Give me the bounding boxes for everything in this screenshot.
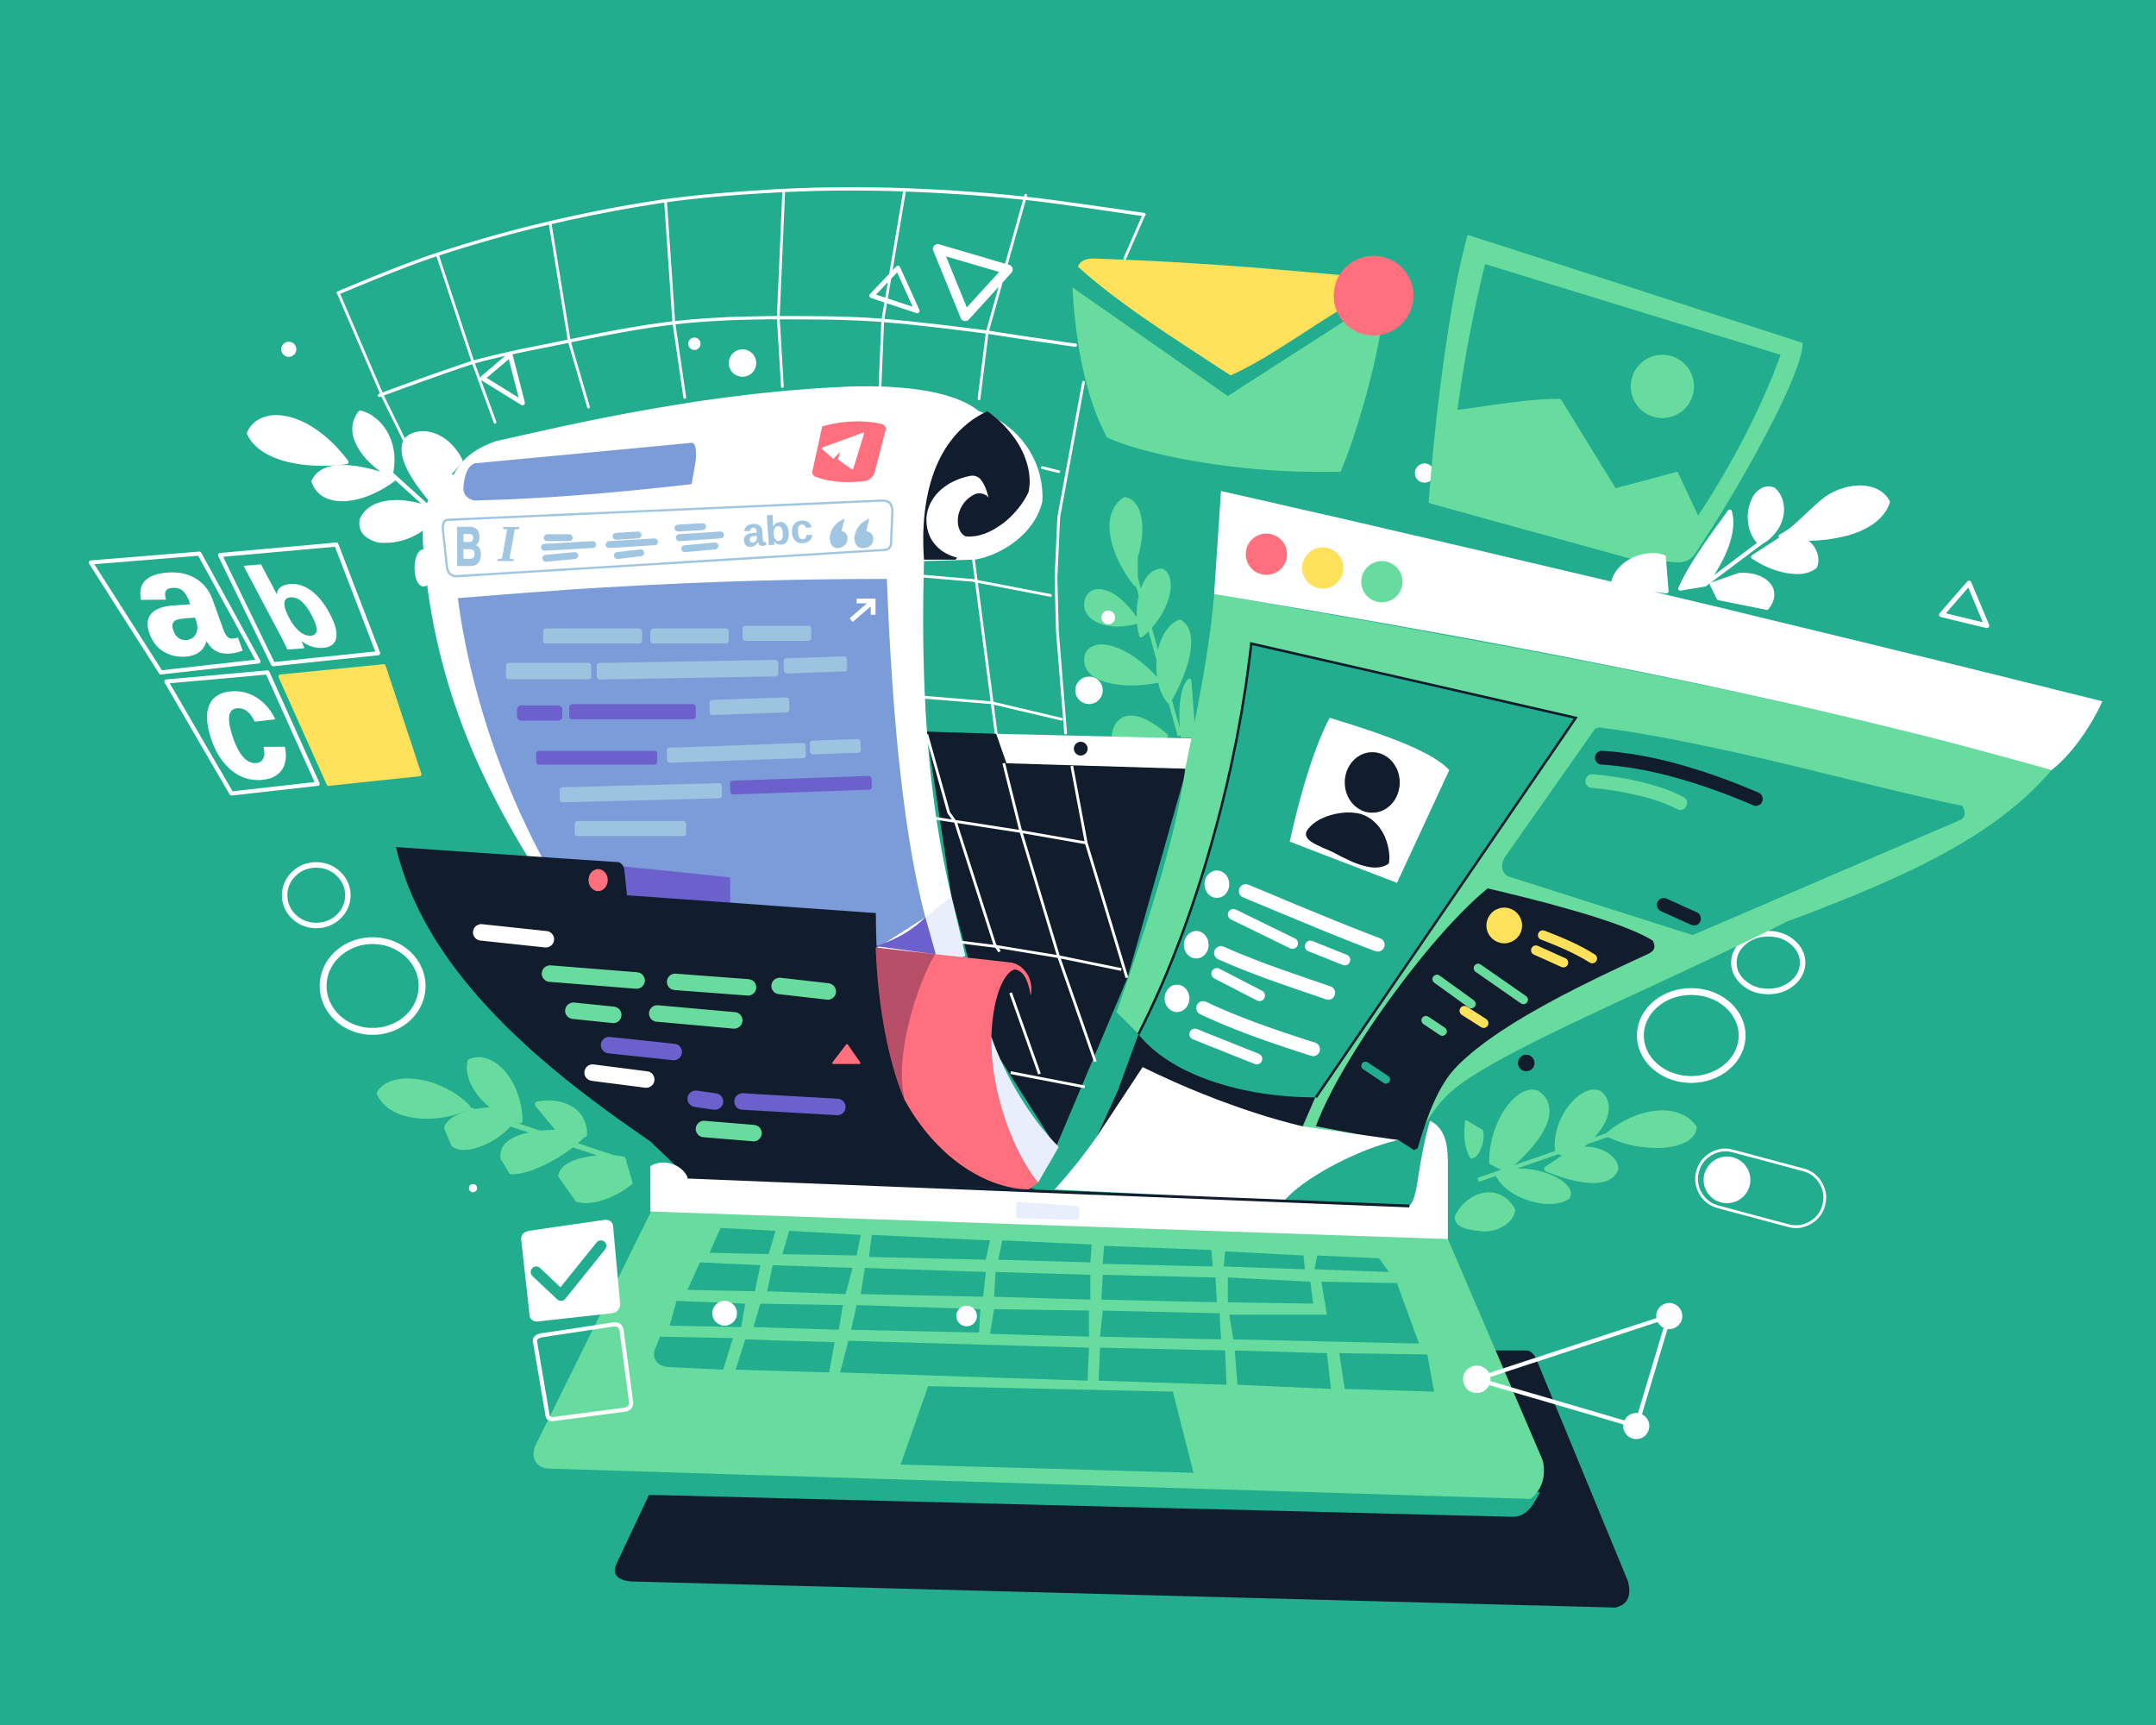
browser window — [1035, 491, 2103, 1189]
checkbox empty — [535, 1324, 631, 1419]
warning triangle — [833, 1045, 859, 1063]
white paper sheet — [1055, 1067, 1398, 1201]
image card — [1430, 236, 1802, 561]
tile c: c — [172, 632, 309, 813]
formatting toolbar: B — [455, 516, 482, 577]
formatting toolbar: abc — [741, 505, 815, 556]
browser lower strip — [1035, 1012, 1138, 1189]
laptop lid edge — [650, 1120, 1448, 1239]
checkbox checked — [521, 1220, 620, 1321]
dark under band — [1097, 1034, 1316, 1136]
scattered dots — [281, 337, 1434, 1192]
formatting toolbar — [442, 500, 893, 577]
dark dot — [1518, 1055, 1534, 1071]
laptop screen — [927, 731, 1192, 1147]
envelope — [1073, 256, 1413, 472]
text panel — [458, 579, 925, 949]
letter tiles a b c — [91, 517, 419, 813]
browser title bar — [1214, 491, 2103, 770]
browser body — [1117, 594, 2052, 1155]
green leaves bottom right — [1457, 1093, 1694, 1228]
center leaf dots — [1075, 611, 1115, 704]
icon: send — [812, 422, 886, 482]
lavender lower edge — [991, 1037, 1059, 1182]
decorative rings — [285, 865, 1802, 1080]
dark code card — [1316, 888, 1654, 1152]
title bar — [463, 442, 696, 500]
tile a: a — [105, 517, 254, 687]
purple fold shadow — [876, 917, 936, 955]
window controls — [1246, 534, 1402, 602]
code lines — [481, 932, 837, 1133]
right content panel — [1502, 727, 1965, 935]
laptop shadow — [615, 1351, 1629, 1608]
keyboard dots — [712, 1301, 977, 1327]
white leaves right — [1613, 487, 1888, 608]
keyboard — [654, 1228, 1434, 1392]
formatting toolbar: I — [497, 516, 520, 574]
red page fold — [876, 948, 1038, 1189]
code sheet — [396, 847, 1038, 1189]
perspective grid — [338, 189, 1144, 734]
purple text lines — [517, 704, 872, 914]
bullet list — [1164, 870, 1378, 1059]
text lines — [506, 625, 861, 836]
document scroll — [423, 386, 1043, 990]
lavender upper edge — [925, 897, 964, 957]
trackpad — [900, 1386, 1194, 1473]
icon: expand arrow — [851, 601, 873, 620]
tile yellow — [280, 666, 419, 784]
toggle switch — [1690, 1144, 1831, 1233]
triangle outlines — [483, 249, 1987, 625]
notification dot — [1334, 256, 1413, 336]
code panel — [396, 847, 1038, 1189]
green leaves center — [1087, 499, 1194, 736]
scroll roll curl — [924, 411, 1030, 560]
tile b: b — [226, 541, 362, 674]
scroll sheet — [423, 386, 1043, 990]
screen teal corner — [1284, 1094, 1451, 1210]
green leaves bottom left — [379, 1060, 630, 1201]
avatar — [1290, 718, 1449, 883]
profile card — [1138, 643, 1576, 1097]
laptop base — [534, 1210, 1544, 1499]
white leaves left — [249, 412, 461, 585]
window dot — [588, 869, 608, 891]
laptop base side — [536, 1465, 1540, 1517]
network nodes — [1463, 1303, 1683, 1440]
